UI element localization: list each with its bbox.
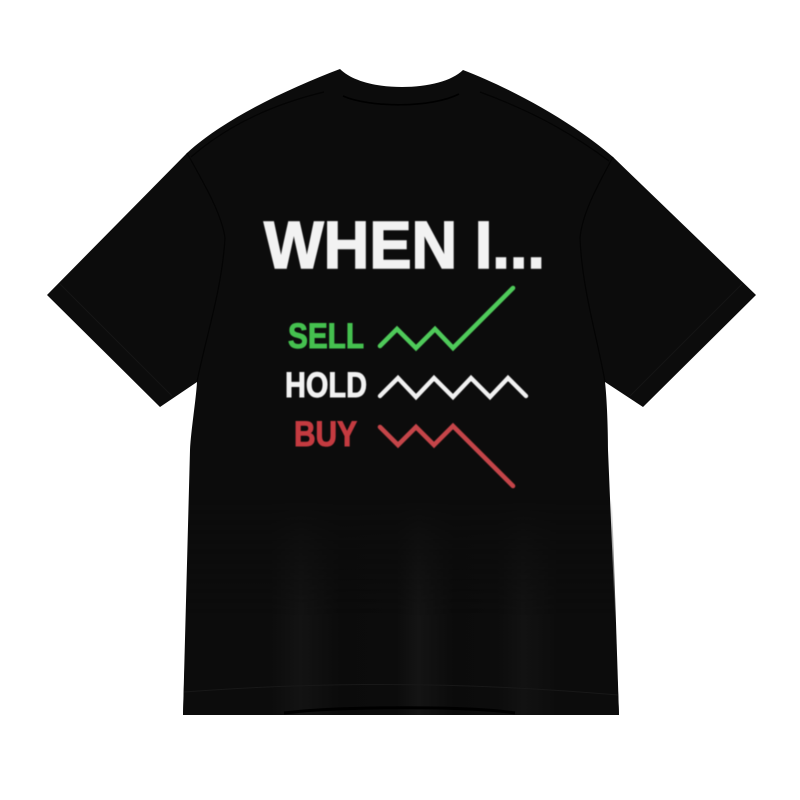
title: WHEN I... bbox=[264, 208, 545, 283]
chart line: sell rising bbox=[380, 288, 513, 348]
chart line: buy falling bbox=[380, 426, 513, 486]
label: hold: HOLD bbox=[285, 366, 367, 405]
label: sell: SELL bbox=[288, 317, 364, 356]
t-shirt bbox=[47, 69, 756, 715]
fabric folds bbox=[183, 500, 619, 715]
chart line: hold flat bbox=[380, 378, 526, 397]
label: buy: BUY bbox=[294, 415, 357, 454]
print design bbox=[264, 208, 545, 486]
collar seam bbox=[343, 94, 459, 105]
shirt silhouette bbox=[47, 69, 756, 715]
sleeve and hem seams bbox=[60, 92, 742, 713]
infographic: t-shirt mockup bbox=[47, 69, 756, 715]
